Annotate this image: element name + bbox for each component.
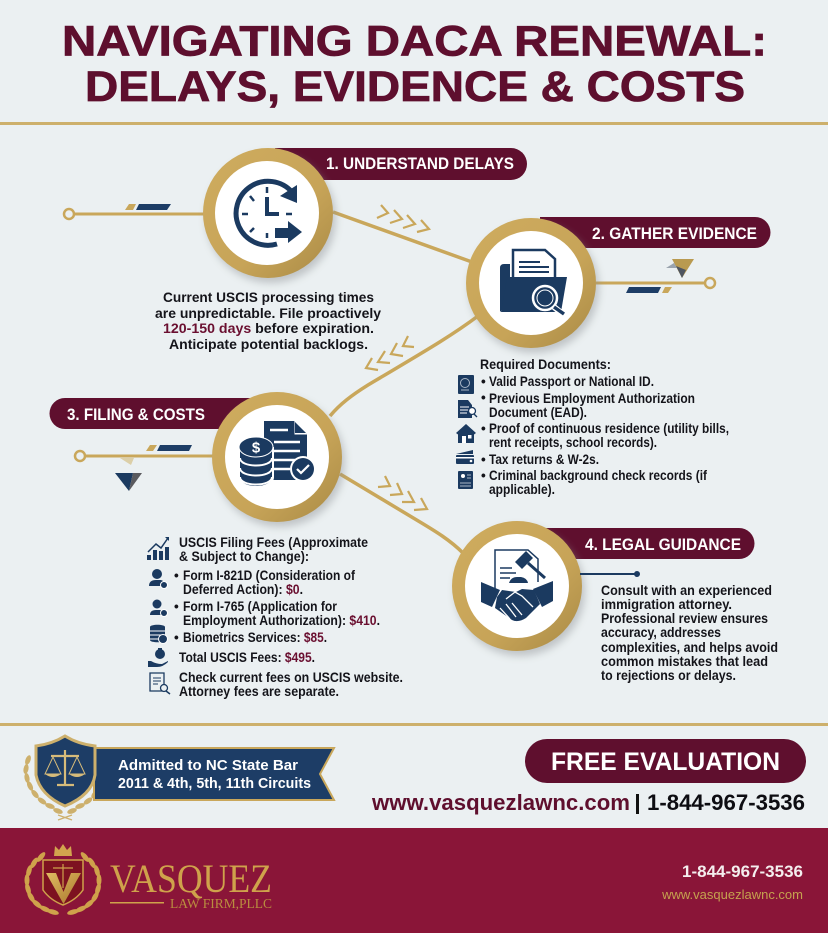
icon: record sheet	[458, 471, 473, 489]
icon: coins and document: $	[252, 440, 261, 456]
text block: filing fees	[174, 535, 403, 699]
ribbon: gather evidence	[540, 217, 770, 248]
icon: growth chart	[147, 537, 169, 560]
icon: person check	[149, 569, 168, 588]
title	[62, 18, 767, 111]
text block: legal guidance: accuracy, addresses	[601, 625, 721, 640]
contact line: www.vasquezlawnc.com	[371, 790, 630, 815]
text block: required documents: Required Documents:	[480, 357, 611, 372]
logo wordmark: VASQUEZ	[110, 856, 272, 901]
icon: folder with magnifier	[500, 250, 567, 315]
timeline accent left	[75, 445, 214, 491]
panel: step 1 understand delays	[64, 148, 527, 352]
text block: required documents: applicable).	[489, 482, 555, 497]
icon: passport	[458, 375, 474, 394]
text block: delays: 120-150 days before expiration.	[163, 320, 374, 336]
text block: filing fees: Biometrics Services: $85.	[183, 630, 327, 645]
text block: legal guidance: complexities, and helps avoid	[601, 640, 778, 655]
chevron arrows: step 3 to 4	[378, 476, 427, 510]
free evaluation button	[525, 739, 806, 783]
text block: required documents: Criminal background check records (if	[489, 468, 707, 483]
text block: filing fees: •	[174, 568, 179, 583]
title: DELAYS, EVIDENCE & COSTS	[85, 63, 745, 111]
text block: filing fees: USCIS Filing Fees (Approximate	[179, 535, 368, 550]
text block: delays: Current USCIS processing times	[163, 289, 374, 305]
footer band	[0, 828, 828, 933]
text block: required documents: Tax returns & W-2s.	[489, 452, 599, 467]
icon: person document	[150, 600, 168, 616]
footer phone: 1-844-967-3536	[682, 862, 803, 881]
footer website: www.vasquezlawnc.com	[661, 887, 803, 902]
medallion circle	[466, 218, 599, 353]
text block: filing fees: & Subject to Change):	[179, 549, 309, 564]
icon: coin stack	[150, 625, 168, 644]
connector lines	[330, 212, 478, 553]
shield with scales	[36, 736, 95, 806]
ribbon: 2011 & 4th, 5th, 11th Circuits	[118, 776, 311, 792]
contact line: 1-844-967-3536	[647, 790, 805, 815]
icon: hand with money bag	[148, 648, 168, 667]
text block: legal guidance: to rejections or delays.	[601, 668, 736, 683]
text block: filing fees: Deferred Action): $0.	[183, 582, 303, 597]
text block: required documents: •	[481, 421, 486, 436]
text block: filing fees: Form I-765 (Application for	[183, 599, 338, 614]
text block: required documents: Document (EAD).	[489, 405, 587, 420]
ribbon: understand delays: 1. UNDERSTAND DELAYS	[326, 154, 514, 173]
ribbon	[94, 748, 334, 800]
text block: required documents: Previous Employment Authorization	[489, 391, 695, 406]
timeline accent right	[596, 259, 715, 293]
text block: required documents: rent receipts, school records).	[489, 435, 657, 450]
text block: legal guidance: common mistakes that lead	[601, 654, 768, 669]
text block: filing fees: Check current fees on USCIS website.	[179, 670, 403, 685]
text block: filing fees: Form I-821D (Consideration of	[183, 568, 355, 583]
text block: filing fees: Total USCIS Fees: $495.	[179, 650, 315, 665]
panel: step 4 legal guidance	[452, 521, 778, 683]
text block: required documents	[480, 357, 729, 497]
logo wordmark: LAW FIRM,PLLC	[170, 897, 272, 912]
icon: gavel and handshake	[481, 550, 553, 621]
ribbon: filing and costs	[49, 398, 262, 429]
medallion circle	[212, 392, 345, 527]
text block: required documents: •	[481, 374, 486, 389]
ribbon: legal guidance: 4. LEGAL GUIDANCE	[585, 535, 741, 554]
bar admission badge	[23, 736, 334, 820]
ribbon: legal guidance	[540, 528, 754, 559]
ribbon: understand delays	[275, 148, 527, 180]
chevron arrows: step 1 to 2	[377, 205, 429, 232]
laurel wreath	[23, 754, 107, 820]
icon: document search	[150, 673, 170, 694]
text block: required documents: Proof of continuous residence (utility bills,	[489, 421, 729, 436]
text block: required documents: •	[481, 468, 486, 483]
text block: legal guidance: Consult with an experienced	[601, 583, 772, 598]
panel: step 2 gather evidence	[456, 217, 770, 497]
chevron arrows: step 2 to 3	[366, 336, 414, 370]
icon: cards	[456, 450, 474, 464]
text block: required documents: •	[481, 452, 486, 467]
ribbon: Admitted to NC State Bar	[118, 758, 298, 774]
text block: required documents: Valid Passport or National ID.	[489, 374, 654, 389]
text block: filing fees: •	[174, 630, 179, 645]
icon: house	[456, 424, 476, 443]
text block: legal guidance	[601, 583, 778, 683]
text block: legal guidance: Professional review ensures	[601, 611, 768, 626]
title: NAVIGATING DACA RENEWAL:	[62, 18, 767, 66]
medallion circle	[203, 148, 336, 283]
text block: delays	[155, 289, 381, 352]
icon: clock with arrows	[236, 181, 302, 245]
free evaluation button: FREE EVALUATION	[551, 748, 780, 776]
text block: delays: Anticipate potential backlogs.	[169, 336, 368, 352]
icon: tax document	[458, 400, 477, 418]
icon: coins and document	[238, 421, 316, 488]
panel: step 3 filing and costs	[49, 392, 403, 699]
timeline accent left	[64, 204, 204, 219]
ribbon: gather evidence: 2. GATHER EVIDENCE	[592, 224, 757, 243]
text block: filing fees: Employment Authorization): $410.	[183, 613, 380, 628]
text block: filing fees: •	[174, 599, 179, 614]
connector with dot	[580, 571, 640, 577]
medallion circle	[452, 521, 585, 656]
text block: delays: are unpredictable. File proactively	[155, 305, 381, 321]
contact line	[371, 790, 805, 815]
text block: legal guidance: immigration attorney.	[601, 597, 732, 612]
text block: required documents: •	[481, 390, 486, 405]
ribbon: filing and costs: 3. FILING & COSTS	[67, 405, 205, 424]
text block: filing fees: Attorney fees are separate.	[179, 684, 339, 699]
logo crest	[24, 844, 102, 916]
